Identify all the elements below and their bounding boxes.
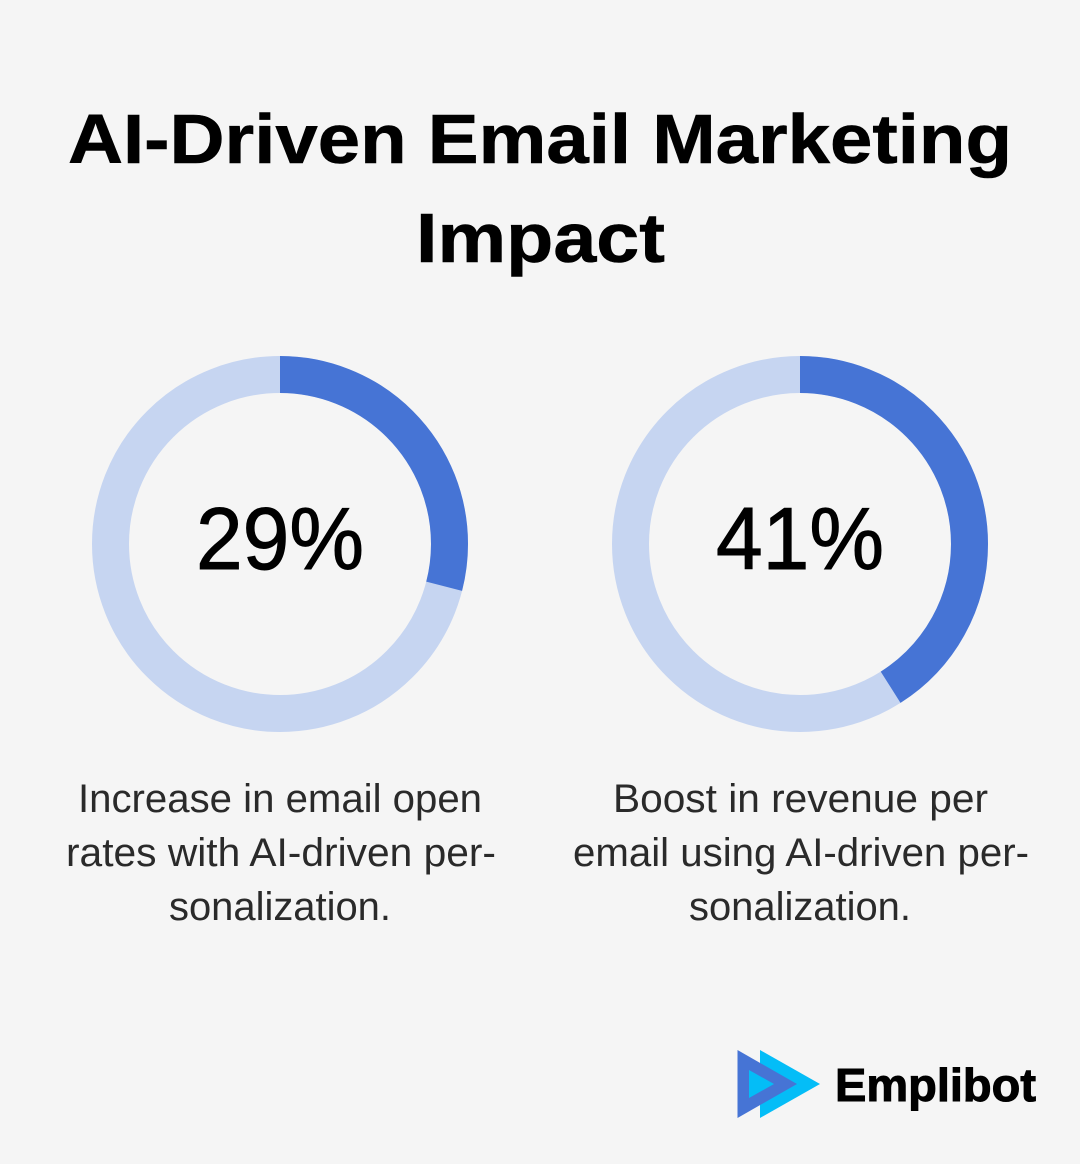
- description: revenue: Boost in revenue per: [613, 777, 988, 821]
- description: open rates: sonalization.: [169, 885, 391, 929]
- icon: play triangles: [738, 1050, 820, 1118]
- value: 41%: 41%: [716, 489, 884, 588]
- value: 29%: 29%: [196, 489, 364, 588]
- donut chart: 41%: [630, 374, 970, 714]
- description: revenue: [573, 777, 1029, 929]
- title: AI-Driven Email Marketing: [68, 100, 1012, 178]
- description: open rates: Increase in email open: [78, 777, 482, 821]
- donut chart: 29%: [110, 374, 450, 714]
- description: open rates: [66, 777, 496, 929]
- title: [68, 100, 1012, 277]
- description: open rates: rates with AI-driven per-: [66, 831, 496, 875]
- logo: Emplibot: [738, 1050, 1036, 1118]
- description: revenue: email using AI-driven per-: [573, 831, 1029, 875]
- panel: open rates stat: [66, 374, 496, 929]
- panel: revenue stat: [573, 374, 1029, 929]
- description: revenue: sonalization.: [689, 885, 911, 929]
- title: Impact: [416, 199, 665, 277]
- wordmark: Emplibot: [835, 1059, 1036, 1111]
